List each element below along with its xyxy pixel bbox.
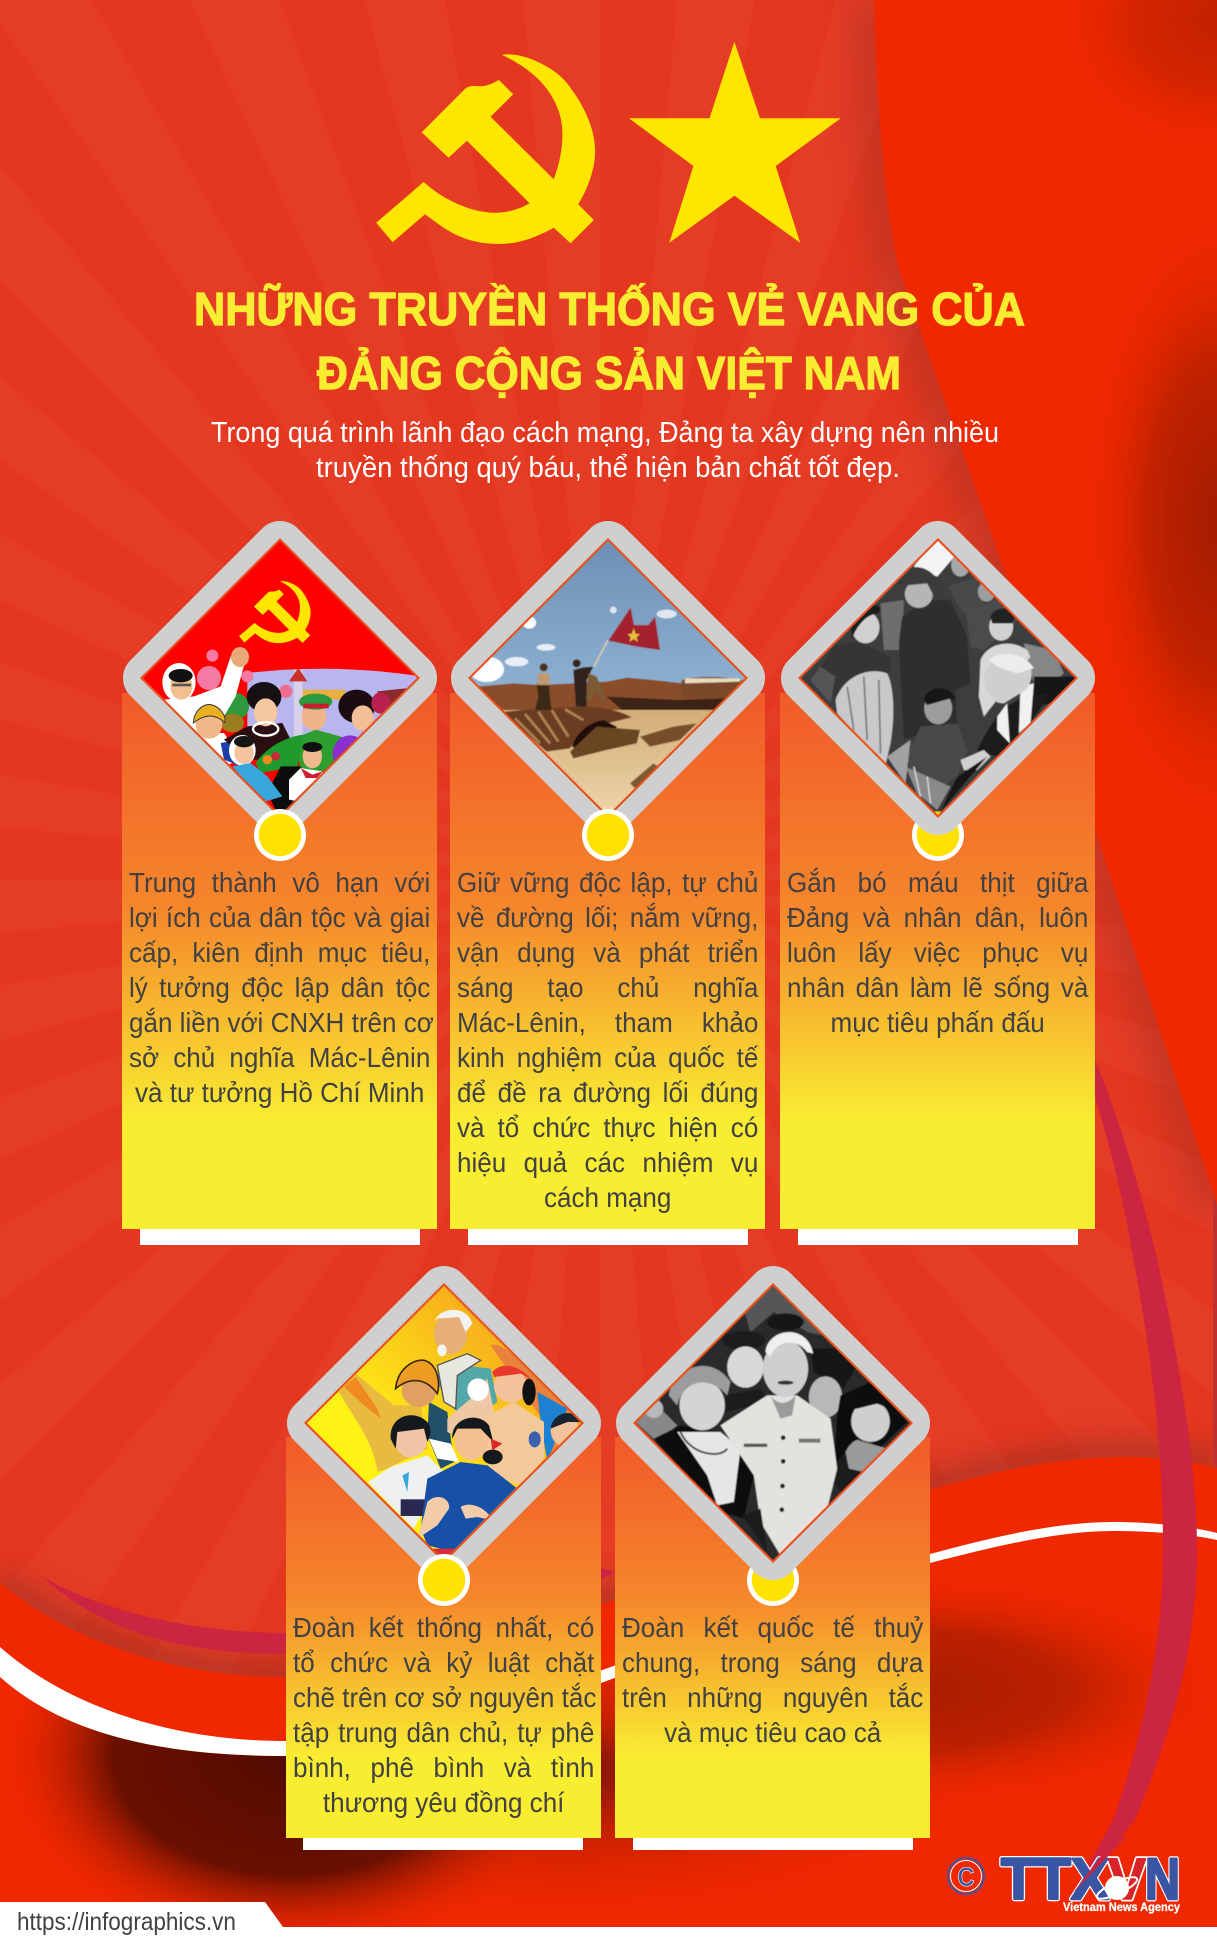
- card 4 bottom strip: [303, 1838, 583, 1850]
- card 2 diamond photo frame: [451, 521, 765, 861]
- panel: card 5: [615, 1266, 930, 1850]
- card 5 text: [622, 1612, 924, 1748]
- TTXVN wordmark: N: [1145, 1847, 1180, 1912]
- card 2 text: sáng tạo chủ nghĩa: [457, 972, 758, 1002]
- right edge strip: [1213, 1193, 1217, 1468]
- TTXVN wordmark: TTX: [1001, 1847, 1109, 1912]
- crimson swoosh left: [43, 1568, 615, 1654]
- card 2 text: để đề ra đường lối đúng: [457, 1076, 758, 1108]
- panel: card 2: [450, 521, 765, 1245]
- globe mark: [1095, 1873, 1139, 1903]
- TTXVN wordmark: N: [1145, 1847, 1180, 1912]
- card 1 text: gắn liền với CNXH trên cơ: [129, 1006, 434, 1038]
- card 2 gradient body: [450, 693, 765, 1229]
- card 3 text: [787, 866, 1088, 1038]
- footer url: https://infographics.vn: [17, 1908, 236, 1936]
- card 2 text: vận dụng và phát triển: [457, 936, 758, 968]
- card 3 diamond photo frame: [781, 521, 1095, 861]
- copyright symbol: C: [958, 1862, 974, 1892]
- TTXVN wordmark: V: [1108, 1847, 1146, 1912]
- panel: card 4: [286, 1266, 601, 1850]
- card 1 text: cấp, kiên định mục tiêu,: [129, 936, 430, 968]
- card 3 text: Đảng và nhân dân, luôn: [787, 902, 1088, 932]
- card 4 text: bình, phê bình và tình: [293, 1752, 594, 1782]
- card 2 circle marker: [582, 809, 634, 861]
- card 1 text: Trung thành vô hạn với: [129, 866, 430, 898]
- panel: card 1: [122, 521, 437, 1245]
- title: [194, 282, 1025, 399]
- photo: villagers black and white: [801, 541, 1075, 815]
- card 1 circle marker: [254, 809, 306, 861]
- card 1 bottom strip: [140, 1229, 420, 1245]
- icon: hammer and sickle: [376, 54, 596, 244]
- photo: flag over bunker: [471, 541, 745, 810]
- crimson swoosh right: [1073, 1060, 1197, 1893]
- card 3 gradient body: [780, 693, 1095, 1229]
- card 1 text: lợi ích của dân tộc và giai: [129, 902, 430, 932]
- card 1 text: và tư tưởng Hồ Chí Minh: [135, 1076, 424, 1108]
- card 2 text: Giữ vững độc lập, tự chủ: [457, 866, 758, 898]
- card 3 text: mục tiêu phấn đấu: [831, 1006, 1045, 1038]
- subtitle: Trong quá trình lãnh đạo cách mạng, Đảng ta xây dựng nên nhiều: [211, 417, 999, 449]
- title: NHỮNG TRUYỀN THỐNG VẺ VANG CỦA: [194, 283, 1025, 335]
- TTXVN wordmark: V: [1108, 1847, 1146, 1912]
- card 3 text: luôn lấy việc phục vụ: [787, 936, 1088, 968]
- crimson tip over logo: [1073, 1835, 1128, 1893]
- card 2 text: kinh nghiệm của quốc tế: [457, 1042, 758, 1072]
- card 1 text: sở chủ nghĩa Mác-Lênin: [129, 1042, 430, 1072]
- title: ĐẢNG CỘNG SẢN VIỆT NAM: [317, 347, 901, 399]
- card 5 text: chung, trong sáng dựa: [622, 1646, 923, 1678]
- card 4 gradient body: [286, 1437, 601, 1838]
- card 4 circle marker: [418, 1554, 470, 1606]
- card 4 text: [293, 1612, 596, 1818]
- panel: card 3: [780, 521, 1095, 1245]
- card 3 circle marker: [912, 809, 964, 861]
- card 3 text: Gắn bó máu thịt giữa: [787, 866, 1088, 898]
- card 2 text: và tổ chức thực hiện có: [457, 1112, 758, 1142]
- photo: party flag and people: [143, 541, 417, 810]
- card 2 text: về đường lối; nắm vững,: [457, 902, 758, 932]
- card 4 text: tổ chức và kỷ luật chặt: [293, 1646, 594, 1678]
- card 5 circle marker: [747, 1554, 799, 1606]
- card 2 text: Mác-Lênin, tham khảo: [457, 1006, 758, 1038]
- card 5 gradient body: [615, 1437, 930, 1838]
- card 4 diamond photo frame: [287, 1266, 601, 1606]
- card 5 text: Đoàn kết quốc tế thuỷ: [622, 1612, 923, 1642]
- subtitle: [211, 417, 999, 484]
- card 1 gradient body: [122, 693, 437, 1229]
- copyright symbol: [948, 1858, 984, 1894]
- photo: workers illustration: [307, 1286, 581, 1554]
- card 2 bottom strip: [468, 1229, 748, 1245]
- card 4 text: thương yêu đồng chí: [323, 1786, 564, 1818]
- card 3 text: nhân dân làm lẽ sống và: [787, 972, 1088, 1002]
- card 5 diamond photo frame: [616, 1266, 930, 1606]
- card 5 text: và mục tiêu cao cả: [664, 1716, 881, 1748]
- card 5 bottom strip: [633, 1838, 913, 1850]
- card 1 text: [129, 866, 434, 1108]
- icon: star: [629, 42, 841, 243]
- card 3 bottom strip: [798, 1229, 1078, 1245]
- subtitle: truyền thống quý báu, thể hiện bản chất tốt đẹp.: [316, 452, 900, 484]
- photo: leader with villagers: [636, 1286, 910, 1560]
- card 1 text: lý tưởng độc lập dân tộc: [129, 972, 430, 1002]
- card 4 text: chẽ trên cơ sở nguyên tắc: [293, 1682, 596, 1712]
- card 2 text: hiệu quả các nhiệm vụ: [457, 1146, 758, 1178]
- card 5 text: trên những nguyên tắc: [622, 1682, 923, 1712]
- white swoosh: [0, 1522, 1217, 1756]
- TTXVN wordmark: TTX: [1001, 1847, 1109, 1912]
- card 2 text: [457, 866, 758, 1213]
- card 4 text: tập trung dân chủ, tự phê: [293, 1716, 594, 1748]
- agency caption: Vietnam News Agency: [1063, 1900, 1180, 1914]
- card 4 text: Đoàn kết thống nhất, có: [293, 1612, 594, 1642]
- card 1 diamond photo frame: [123, 521, 437, 861]
- card 2 text: cách mạng: [544, 1182, 671, 1212]
- TTXVN wordmark: [1001, 1847, 1180, 1912]
